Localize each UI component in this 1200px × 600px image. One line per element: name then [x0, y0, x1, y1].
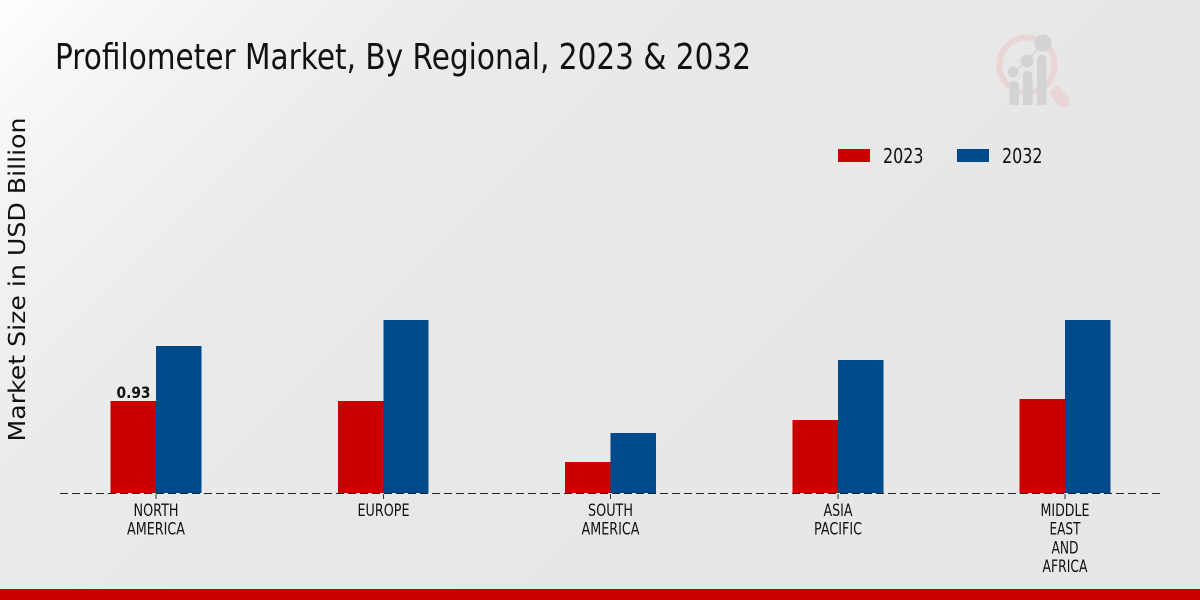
label: Asia Pacific: [814, 501, 862, 540]
x axis labels: [127, 501, 1090, 577]
label: Europe: EUROPE: [358, 501, 410, 521]
legend item: 2023: 2023: [883, 144, 924, 168]
label: Middle East and Africa: EAST: [1050, 520, 1081, 540]
label: North America: AMERICA: [127, 520, 185, 540]
bars: Asia Pacific: [792, 360, 884, 493]
legend item: 2032: [957, 144, 1042, 168]
icon: watermark logo: [1000, 34, 1070, 108]
label: South America: AMERICA: [582, 520, 640, 540]
label: Middle East and Africa: [1040, 501, 1090, 577]
label: Asia Pacific: PACIFIC: [814, 520, 862, 540]
value label: 0.93: 0.93: [116, 383, 150, 402]
legend: [838, 144, 1042, 168]
label: Middle East and Africa: MIDDLE: [1040, 501, 1090, 521]
legend item: 2023: [838, 144, 924, 168]
label: South America: [582, 501, 640, 540]
title: Profilometer Market, By Regional, 2023 & 2032: [55, 37, 751, 78]
bars: Europe: [338, 320, 428, 493]
legend item: 2032: 2032: [1002, 144, 1042, 168]
label: Asia Pacific: ASIA: [824, 501, 853, 521]
label: North America: [127, 501, 185, 540]
y axis label: Market Size in USD Billion: [5, 118, 31, 442]
bars: Middle East and Africa: [1020, 320, 1110, 493]
bar chart: [60, 320, 1160, 499]
footer bar: [0, 589, 1200, 600]
bars: South America: [565, 433, 656, 493]
label: Middle East and Africa: AND: [1052, 538, 1078, 558]
bars: North America: [110, 346, 202, 493]
label: South America: SOUTH: [588, 501, 633, 521]
label: North America: NORTH: [134, 501, 178, 521]
label: Middle East and Africa: AFRICA: [1042, 557, 1088, 577]
